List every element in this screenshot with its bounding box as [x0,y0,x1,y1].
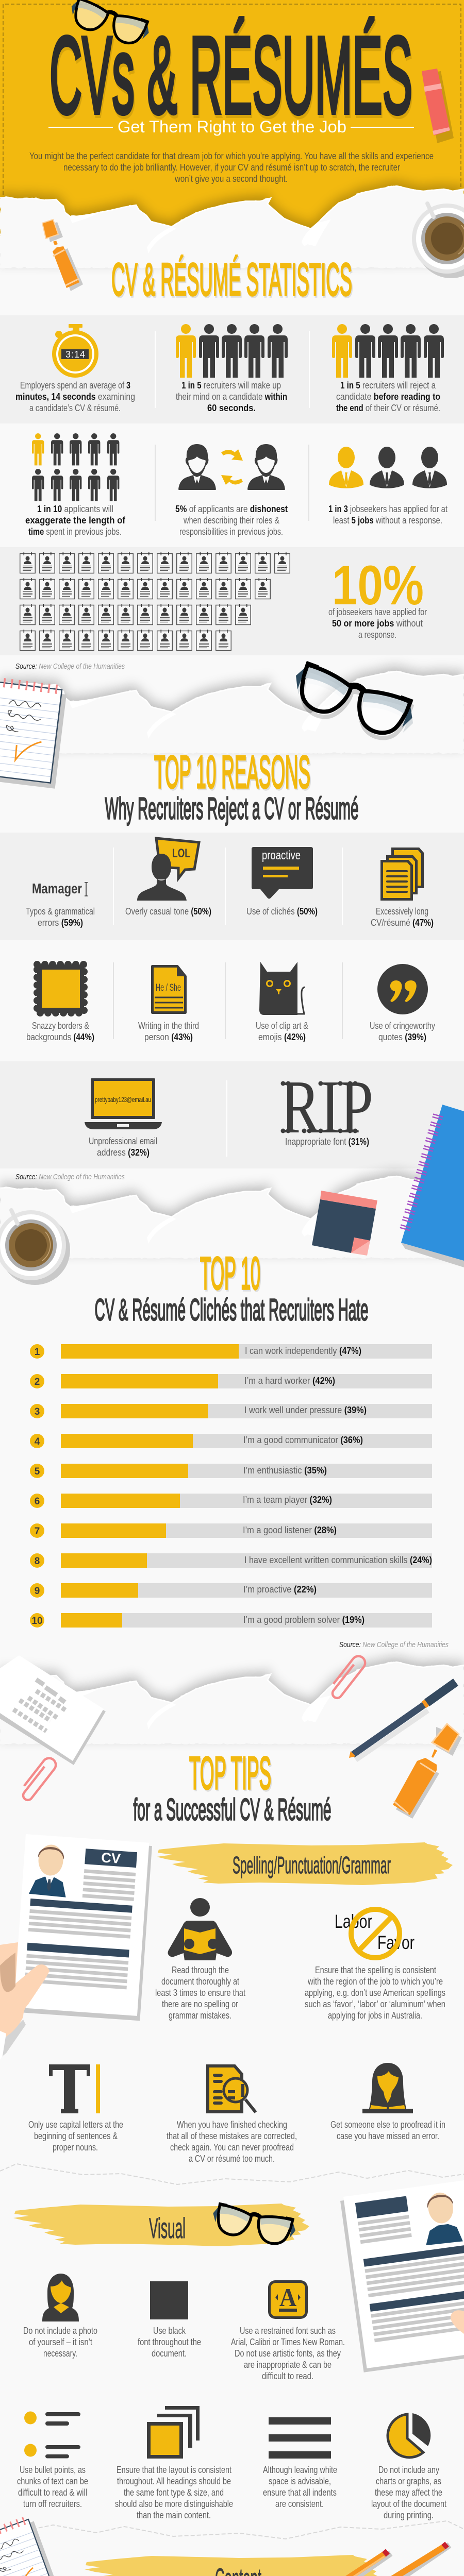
bar 10: 10 [31,1616,43,1626]
text: layout: than the main content. [137,2510,211,2520]
icon: notepad [0,2518,62,2576]
icon: five people, one highlighted [332,324,444,378]
icon: proactive bubble: proactive [262,849,301,862]
bar 2 [30,1374,432,1388]
panel: top tips [0,1653,464,2576]
text: capitals: proper nouns. [53,2142,98,2153]
text: layout [115,2465,233,2520]
bar 7: 7 [35,1526,40,1537]
icon: coffee cup [412,204,464,278]
intro text [29,151,434,184]
icon: typo: Mamager [32,880,82,896]
text: white space [263,2465,337,2509]
icon: paper clip [327,1653,368,1700]
icon: CV sheet held by hand [0,1834,152,2060]
text: third person: Writing in the third [138,1021,199,1031]
bar 9: 9 [35,1586,40,1597]
text: 10 percent of jobseekers: of jobseekers have applied for [328,607,427,617]
icon: stopwatch [52,324,98,378]
icon: LOL speech bubble: LOL [172,846,190,860]
text: bullets: Use bullet points, as [20,2465,86,2475]
text: use black: document. [152,2348,187,2359]
bar 2: I’m a hard worker (42%) [244,1376,335,1386]
divider line [113,962,342,1039]
text: restrained font: Arial, Calibri or Times New Roman. [231,2337,345,2347]
bar 7: I’m a good listener (28%) [243,1525,337,1535]
icon: paper clip [18,1755,58,1802]
icon: ten people grid [32,433,119,501]
icon: woman reading [362,2063,413,2113]
bar 3: I work well under pressure (39%) [244,1405,367,1415]
divider line [113,848,342,925]
text: 1 in 10: 1 in 10 applicants will [37,504,113,514]
text: layout: Ensure that the layout is consistent [117,2465,231,2475]
text: restrained font: are inappropriate & can be [244,2360,332,2370]
icon: indent bars [269,2417,331,2459]
bar 1: 1 [35,1347,40,1358]
intro text: necessary to do the job brilliantly. However, if your CV and résumé isn’t up to scratch, the recruiter [63,162,400,173]
bar 8: I have excellent written communication skills (24%) [244,1555,432,1565]
text: layout: throughout. All headings should be [117,2476,231,2486]
text: email: address (32%) [97,1147,150,1158]
text: use black [138,2326,201,2359]
bar 2: 2 [35,1377,40,1387]
panel: top 10 cliches [0,1105,464,1649]
icon: woman [42,2274,79,2321]
subsection banner: visual: Visual [149,2212,186,2244]
icon: consistent pages [148,2406,200,2456]
bar 1: I can work independently (47%) [245,1346,361,1356]
text: time spent [15,380,135,413]
bar 6: 6 [35,1496,40,1507]
text: quotes: quotes (39%) [378,1032,426,1042]
bar 5: I’m enthusiastic (35%) [243,1465,327,1476]
icon: black rectangle [150,2281,188,2319]
text: capitals: beginning of sentences & [34,2131,118,2141]
icon: labor favor prohibited: Labor [335,1911,372,1932]
text: proofread [330,2120,445,2141]
icon: 50 CV sheets [20,552,290,650]
text: restrained font: Do not use artistic fonts, as they [235,2348,341,2359]
text: 1 in 3: least 5 jobs without a response. [333,515,442,526]
icon: laptop with email [85,1078,162,1129]
source note: Source: New College of the Humanities [15,662,125,671]
text: bullets: chunks of text can be [17,2476,88,2486]
bar 4: 4 [35,1436,40,1447]
bar 6: I’m a team player (32%) [243,1495,332,1505]
text: 10 percent of jobseekers: 50 or more jobs without [332,618,423,629]
icon: font A: A [279,2283,296,2312]
icon: five people, one highlighted [176,324,288,378]
text: spelling consistent: applying for jobs in Australia. [328,2010,422,2021]
text: 5% dishonest: responsibilities in previous jobs. [179,527,283,537]
subsection banner: content [85,2555,380,2576]
text: 5% dishonest: when describing their roles & [183,515,279,526]
text: 5% dishonest [175,504,288,537]
text: white space: Although leaving white [263,2465,337,2475]
text: 1 in 10: time spent in previous jobs. [28,527,122,537]
text: third person [138,1021,199,1042]
text: no charts: layout of the document [371,2499,446,2509]
text: 1 in 5 reject: the end of their CV or résumé. [336,403,440,413]
text: 5% dishonest: 5% of applicants are dishonest [175,504,288,514]
text: no charts [371,2465,446,2520]
panel: header [29,0,464,305]
icon: quotation marks [377,964,428,1014]
text: third person: person (43%) [144,1032,193,1042]
text: read through: there are no spelling or [162,1999,238,2009]
text: 10 percent of jobseekers [328,607,427,640]
text: 1 in 5 make up mind: their mind on a candidate within [176,392,287,402]
icon: coffee cup [0,1210,70,1285]
icon: navy book with pink label [312,1191,377,1256]
text: 1 in 5 reject: 1 in 5 recruiters will reject a [340,380,436,391]
bar 9 [30,1583,432,1598]
text: time spent: Employers spend an average of 3 [20,380,130,391]
subsection banner: spelling [157,1842,453,1885]
text: no photo: of yourself – it isn’t [29,2337,92,2347]
text: check again: that all of these mistakes are corrected, [167,2131,297,2141]
text: check again: a CV or résumé too much. [189,2154,275,2164]
subsection banner: visual [13,2204,309,2246]
text: white space: are consistent. [275,2499,324,2509]
text: bullets: difficult to read & will [18,2487,87,2498]
text: no photo: Do not include a photo [23,2326,97,2336]
text: font: Inappropriate font (31%) [285,1137,369,1147]
icon: third person document: He / She [156,982,181,993]
icon: capital T [49,2064,100,2113]
panel: top tips: TOP TIPS [189,1747,271,1799]
text: borders [26,1021,94,1042]
text: spelling consistent: Ensure that the spelling is consistent [315,1965,436,1975]
text: 1 in 3 [328,504,448,526]
text: proofread: case you have missed an error. [337,2131,439,2141]
text: spelling consistent [305,1965,445,2021]
panel: top 10 cliches: TOP 10 [200,1247,260,1299]
text: typos: Typos & grammatical [26,906,95,917]
dashed separator [32,2521,464,2539]
text: casual tone: Overly casual tone (50%) [125,906,211,917]
text: typos: errors (59%) [38,918,83,928]
icon: pink highlighter [422,69,454,143]
text: capitals: Only use capital letters at the [28,2120,123,2130]
bar 8 [30,1553,432,1568]
divider line [155,445,309,521]
text: quotes [370,1021,435,1042]
icon: document with magnifier [208,2066,256,2112]
text: layout: the same font type & size, and [124,2487,224,2498]
icon: orange highlighter [393,1724,462,1819]
text: use black: font throughout the [138,2337,201,2347]
text: long cv: Excessively long [376,906,428,917]
icon: pencils [325,2544,450,2576]
icon: large glasses [286,661,420,747]
bar chart [30,1344,432,1628]
text: restrained font: Use a restrained font such as [240,2326,336,2336]
text: read through: document thoroughly at [161,1976,239,1987]
panel: statistics [15,324,448,671]
icon: proactive bubble [252,847,313,899]
icon: notepad [0,682,67,789]
icon: CV sheet at right [340,2178,464,2372]
bar 4: I’m a good communicator (36%) [243,1435,363,1445]
text: no charts: during printing. [384,2510,434,2520]
panel: top 10 reasons [0,661,435,1181]
text: check again: check again. You can never proofread [170,2142,294,2153]
text: read through: Read through the [172,1965,229,1975]
text: long cv [371,906,434,928]
icon: CV sheet held by hand: CV [101,1850,121,1867]
text: borders: backgrounds (44%) [26,1032,94,1042]
text: no photo: necessary. [43,2348,77,2359]
text: typos [26,906,95,928]
icon: orange highlighter [42,219,83,291]
icon: person reading [168,1898,232,1960]
text: clip art [256,1021,308,1042]
text: 1 in 5 reject: candidate before reading to [336,392,440,402]
bar 3 [30,1404,432,1418]
text: white space: space is advisable, [269,2476,331,2486]
bar 8: 8 [35,1556,40,1567]
bar 1 [30,1344,432,1359]
icon: RIP bones lettering: RIP [280,1065,373,1149]
icon: font A [268,2280,308,2319]
text: 1 in 10: exaggerate the length of [25,515,126,526]
bar 3: 3 [35,1406,40,1417]
icon: labor favor prohibited [335,1909,415,1958]
text: borders: Snazzy borders & [32,1021,89,1031]
icon: glasses on banner [209,2203,297,2248]
icon: third person document [153,967,186,1013]
bar 10 [30,1613,432,1628]
bar 9: I’m proactive (22%) [243,1584,317,1595]
text: use black: Use black [153,2326,186,2336]
text: 1 in 5 make up mind: 1 in 5 recruiters will make up [181,380,281,391]
icon: bullet points [24,2411,80,2459]
text: bullets [17,2465,88,2509]
text: read through: least 3 times to ensure that [155,1988,245,1998]
icon: pen [349,1682,456,1760]
divider line [226,1080,227,1157]
text: read through [155,1965,245,2021]
icon: pie chart [388,2413,430,2458]
text: cliches: Use of clichés (50%) [246,906,318,917]
text: 1 in 5 make up mind: 60 seconds. [207,403,256,413]
text: restrained font [231,2326,345,2381]
text: capitals [28,2120,123,2153]
subtitle: Get Them Right to Get the Job [118,117,346,136]
text: quotes: Use of cringeworthy [370,1021,435,1031]
bar 4 [30,1434,432,1448]
text: white space: ensure that all indents [263,2487,337,2498]
text: layout: should also be more distinguishable [115,2499,233,2509]
icon: laptop with email: prettybaby123@email.au [95,1095,151,1104]
text: 1 in 5 reject [336,380,440,413]
dashed separator [0,2164,464,2184]
text: no charts: Do not include any [378,2465,439,2475]
divider line [155,331,309,408]
text: clip art: emojis (42%) [258,1032,306,1042]
bar 7 [30,1523,432,1538]
text: time spent: minutes, 14 seconds examining [15,392,135,402]
icon: blue spiral notebook [401,1105,464,1267]
text: no charts: these may affect the [375,2487,442,2498]
icon: three businessmen [329,447,447,488]
text: 10 percent of jobseekers: a response. [358,630,396,640]
icon: stacked long documents [382,849,423,900]
bar 6 [30,1494,432,1508]
text: email: Unprofessional email [89,1136,157,1146]
text: 1 in 10 [25,504,126,537]
icon: snazzy border frame [37,964,84,1013]
text: restrained font: difficult to read. [262,2371,313,2381]
icon: LOL speech bubble [137,838,199,901]
bar 5: 5 [35,1466,40,1477]
icon: clip art cat [259,962,305,1015]
bar 10: I’m a good problem solver (19%) [243,1615,364,1625]
text: check again: When you have finished checking [177,2120,287,2130]
intro text: won’t give you a second thought. [174,174,288,184]
text: no charts: charts or graphs, as [376,2476,441,2486]
text: time spent: a candidate’s CV & résumé. [29,403,121,413]
icon: glasses on title [66,0,152,49]
icon: labor favor prohibited: Favor [377,1932,415,1953]
text: long cv: CV/résumé (47%) [371,918,434,928]
text: read through: grammar mistakes. [169,2010,231,2021]
text: 1 in 5 make up mind [176,380,287,413]
icon: swapping people with arrows [178,444,285,490]
big number 10%: 10% [332,554,424,616]
text: email [89,1136,157,1158]
bar 5 [30,1464,432,1478]
icon: paper sheet at left [0,1655,106,1765]
text: no photo [23,2326,97,2359]
text: clip art: Use of clip art & [256,1021,308,1031]
icon: stopwatch: 3:14 [65,349,85,360]
text: bullets: turn off recruiters. [23,2499,82,2509]
source note: Source: New College of the Humanities [15,1173,125,1181]
text: check again [167,2120,297,2164]
icon: hand at right [451,2310,464,2334]
